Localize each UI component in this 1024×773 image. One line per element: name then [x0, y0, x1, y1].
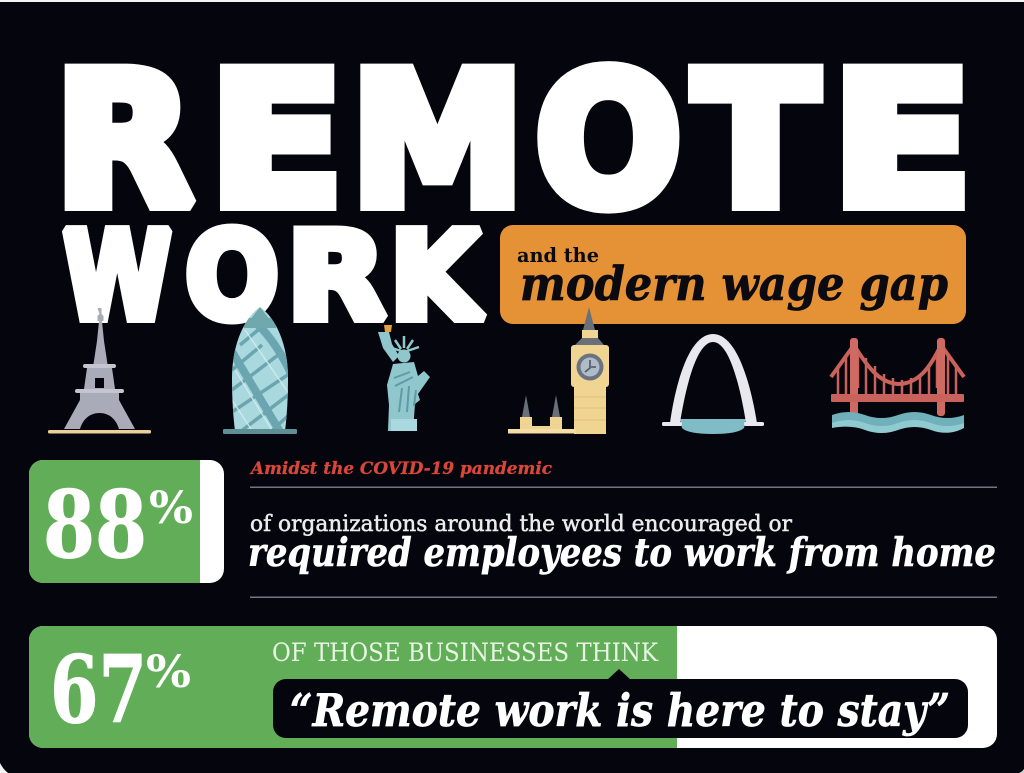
title: WORK — [63, 206, 485, 347]
title: WORK: R — [287, 208, 386, 347]
stat bar: 67% — [29, 626, 997, 748]
title: WORK: O — [185, 207, 279, 347]
text: intro: Amidst the COVID-19 pandemic — [249, 459, 552, 478]
icon: Gherkin building — [223, 307, 297, 440]
stat bar: 67%: 67 — [50, 635, 147, 744]
title: REMOTE: R — [55, 34, 194, 247]
icon: Eiffel Tower — [48, 308, 151, 434]
subtitle badge — [500, 225, 966, 324]
text: 88% description — [248, 512, 996, 576]
icon: Golden Gate Bridge — [831, 338, 964, 433]
title: REMOTE: M — [351, 35, 524, 248]
icon: Gateway Arch — [662, 334, 764, 434]
stat bar: 67%: % — [146, 647, 191, 698]
stat card: 88% — [29, 460, 224, 583]
text: 88% description: of organizations around the world encouraged or — [250, 512, 792, 537]
title: REMOTE — [55, 34, 972, 248]
title: WORK: W — [63, 206, 172, 346]
stat card: 88%: % — [149, 483, 193, 534]
title: REMOTE: E — [210, 34, 343, 247]
subtitle badge: and the — [517, 243, 599, 267]
stat card: 88%: 88 — [43, 470, 147, 579]
title: REMOTE: T — [694, 34, 818, 247]
title: REMOTE: E — [832, 34, 972, 247]
title: WORK: K — [390, 206, 485, 346]
icon: Big Ben and Parliament — [508, 307, 609, 434]
icon: Statue of Liberty — [378, 325, 430, 431]
stat bar: 67%: OF THOSE BUSINESSES THINK — [272, 638, 659, 667]
title: REMOTE: O — [535, 34, 682, 247]
subtitle badge: modern wage gap — [520, 257, 948, 312]
